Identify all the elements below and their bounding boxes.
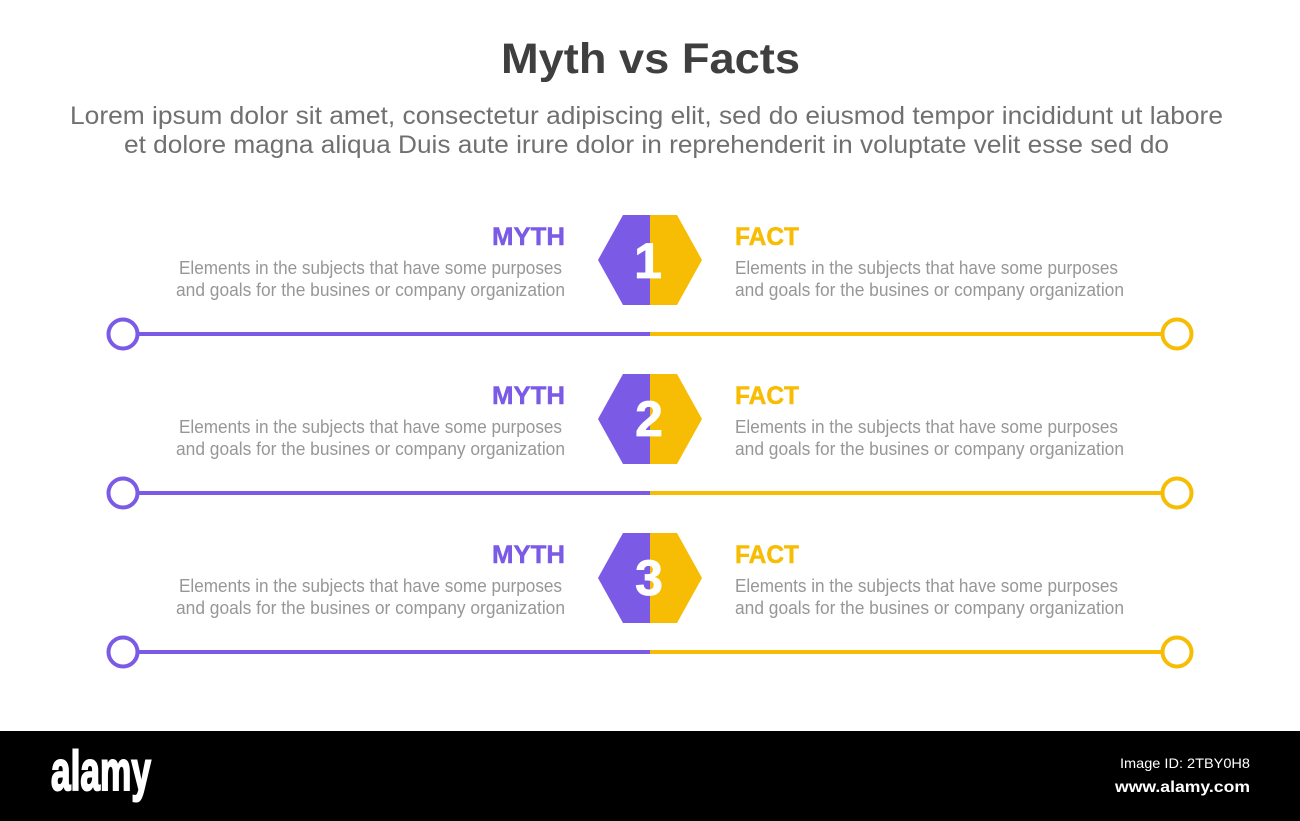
hexagon badge 1	[598, 215, 702, 305]
fact text 3	[735, 541, 1124, 618]
myth text 3: Elements in the subjects that have some purposes	[179, 576, 562, 596]
fact text 1: FACT	[735, 223, 799, 251]
website: www.alamy.com	[1114, 779, 1250, 796]
myth text 1: Elements in the subjects that have some purposes	[179, 258, 562, 278]
myth text 1: MYTH	[492, 223, 565, 251]
panel: row 2	[108, 374, 1192, 508]
fact text 2: FACT	[735, 382, 799, 410]
hexagon badge 3	[598, 533, 702, 623]
myth text 3: and goals for the busines or company organization	[176, 598, 565, 618]
myth text 2	[176, 382, 565, 459]
title: Myth vs Facts	[501, 35, 800, 83]
fact text 1	[735, 223, 1124, 300]
subtitle text block: Lorem ipsum dolor sit amet, consectetur adipiscing elit, sed do eiusmod tempor incididunt ut labore	[70, 102, 1223, 130]
panel: row 3	[108, 533, 1192, 666]
fact text 2	[735, 382, 1124, 459]
myth text 1: and goals for the busines or company organization	[176, 280, 565, 300]
fact text 3: FACT	[735, 541, 799, 569]
fact text 1: Elements in the subjects that have some purposes	[735, 258, 1118, 278]
subtitle text block: et dolore magna aliqua Duis aute irure dolor in reprehenderit in voluptate velit esse sed do	[124, 131, 1169, 159]
hexagon badge 2: 2	[635, 391, 663, 447]
myth text 3: MYTH	[492, 541, 565, 569]
fact text 2: and goals for the busines or company organization	[735, 439, 1124, 459]
panel: row 1	[108, 215, 1192, 348]
fact text 3: Elements in the subjects that have some purposes	[735, 576, 1118, 596]
footer bar	[0, 731, 1300, 821]
timeline 1	[108, 320, 1192, 348]
myth text 2: and goals for the busines or company organization	[176, 439, 565, 459]
myth text 2: MYTH	[492, 382, 565, 410]
hexagon badge 2	[598, 374, 702, 464]
hexagon badge 3: 3	[635, 550, 663, 606]
timeline 2	[108, 478, 1192, 508]
hexagon badge 1: 1	[634, 233, 662, 289]
subtitle text block	[70, 102, 1223, 159]
image id: Image ID: 2TBY0H8	[1120, 755, 1250, 771]
fact text 1: and goals for the busines or company organization	[735, 280, 1124, 300]
alamy logo: alamy	[51, 739, 151, 802]
timeline 3	[108, 638, 1192, 666]
myth text 3	[176, 541, 565, 618]
fact text 3: and goals for the busines or company organization	[735, 598, 1124, 618]
myth text 1	[176, 223, 565, 300]
myth text 2: Elements in the subjects that have some purposes	[179, 417, 562, 437]
fact text 2: Elements in the subjects that have some purposes	[735, 417, 1118, 437]
